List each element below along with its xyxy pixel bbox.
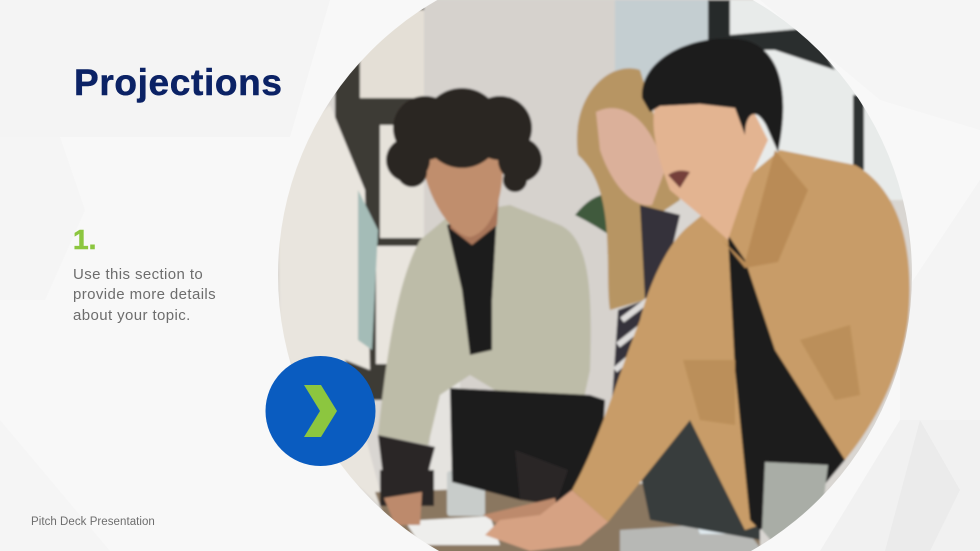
blonde woman [577,68,760,540]
arrow button [266,356,376,466]
curly hair [386,88,542,192]
body text: Use this section to [73,266,203,283]
window right [615,0,908,200]
woman left [378,88,605,525]
left window wall [335,0,430,400]
body text [73,266,216,324]
step number: 1. [73,224,96,255]
footer: Pitch Deck Presentation [31,516,155,528]
title: Projections [74,62,283,103]
table [375,480,760,551]
plant behind blonde woman [574,194,608,234]
garment left [278,105,385,510]
man [485,38,910,551]
photo: team around a table [270,0,920,551]
body text: provide more details [73,286,216,303]
back wall [422,4,432,238]
body text: about your topic. [73,307,191,324]
